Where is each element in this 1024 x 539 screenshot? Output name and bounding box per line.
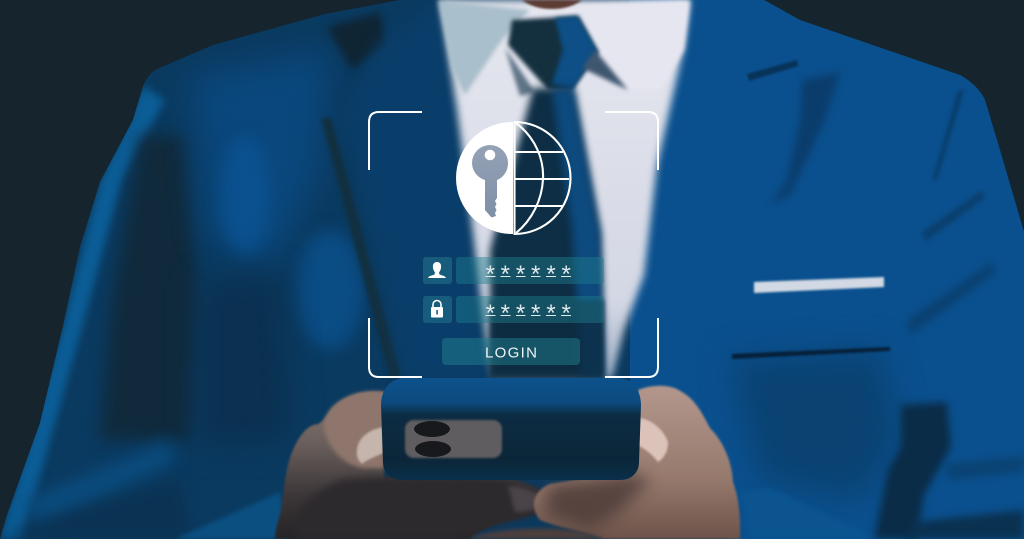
pocket welt [732,347,890,359]
dark sleeve band [100,135,197,440]
lit chest [190,50,330,265]
thumbnail right [637,418,668,462]
masked username: ****** [486,261,571,288]
username field [423,257,604,288]
pocket square [754,277,884,293]
thumbnail [357,427,383,464]
right jacket panel [630,0,1024,539]
right collar [575,0,690,90]
dark lower torso [200,275,290,445]
tie knot [508,16,598,90]
shirt [438,0,690,378]
icon: globe [514,122,570,234]
login button: LOGIN [485,344,537,362]
lower sleeve [25,440,175,530]
collar shadow [582,50,628,90]
masked password: ****** [486,300,571,327]
icon: key [472,145,508,218]
phone [381,378,641,480]
frame corners [369,112,658,377]
phone camera [405,420,502,458]
chin [522,0,582,9]
login button [442,338,580,365]
bright lower band [768,491,779,497]
tie [490,16,628,378]
tie blade [490,88,604,378]
icon: key and globe [456,122,570,234]
right cuff bands [944,456,1024,480]
left hand [275,392,548,539]
login interface overlay [369,112,658,377]
icon: padlock [431,300,443,318]
right lapel notch [747,60,798,81]
left rim light [0,86,165,539]
right hand [468,386,740,539]
lower knuckles shadow [545,474,650,530]
thumb [324,392,384,468]
left collar shadow [327,12,385,70]
lower finger [468,528,605,539]
right lapel folds [770,72,840,205]
icon: user [428,262,446,278]
dark finger [294,475,548,539]
password field [423,296,604,327]
lower torso strip [175,492,290,539]
dark fold patch [874,402,951,539]
left collar [438,0,530,95]
lower right jacket shadow [730,350,900,500]
left lapel crease [321,118,402,378]
left inner lapel [354,18,483,374]
